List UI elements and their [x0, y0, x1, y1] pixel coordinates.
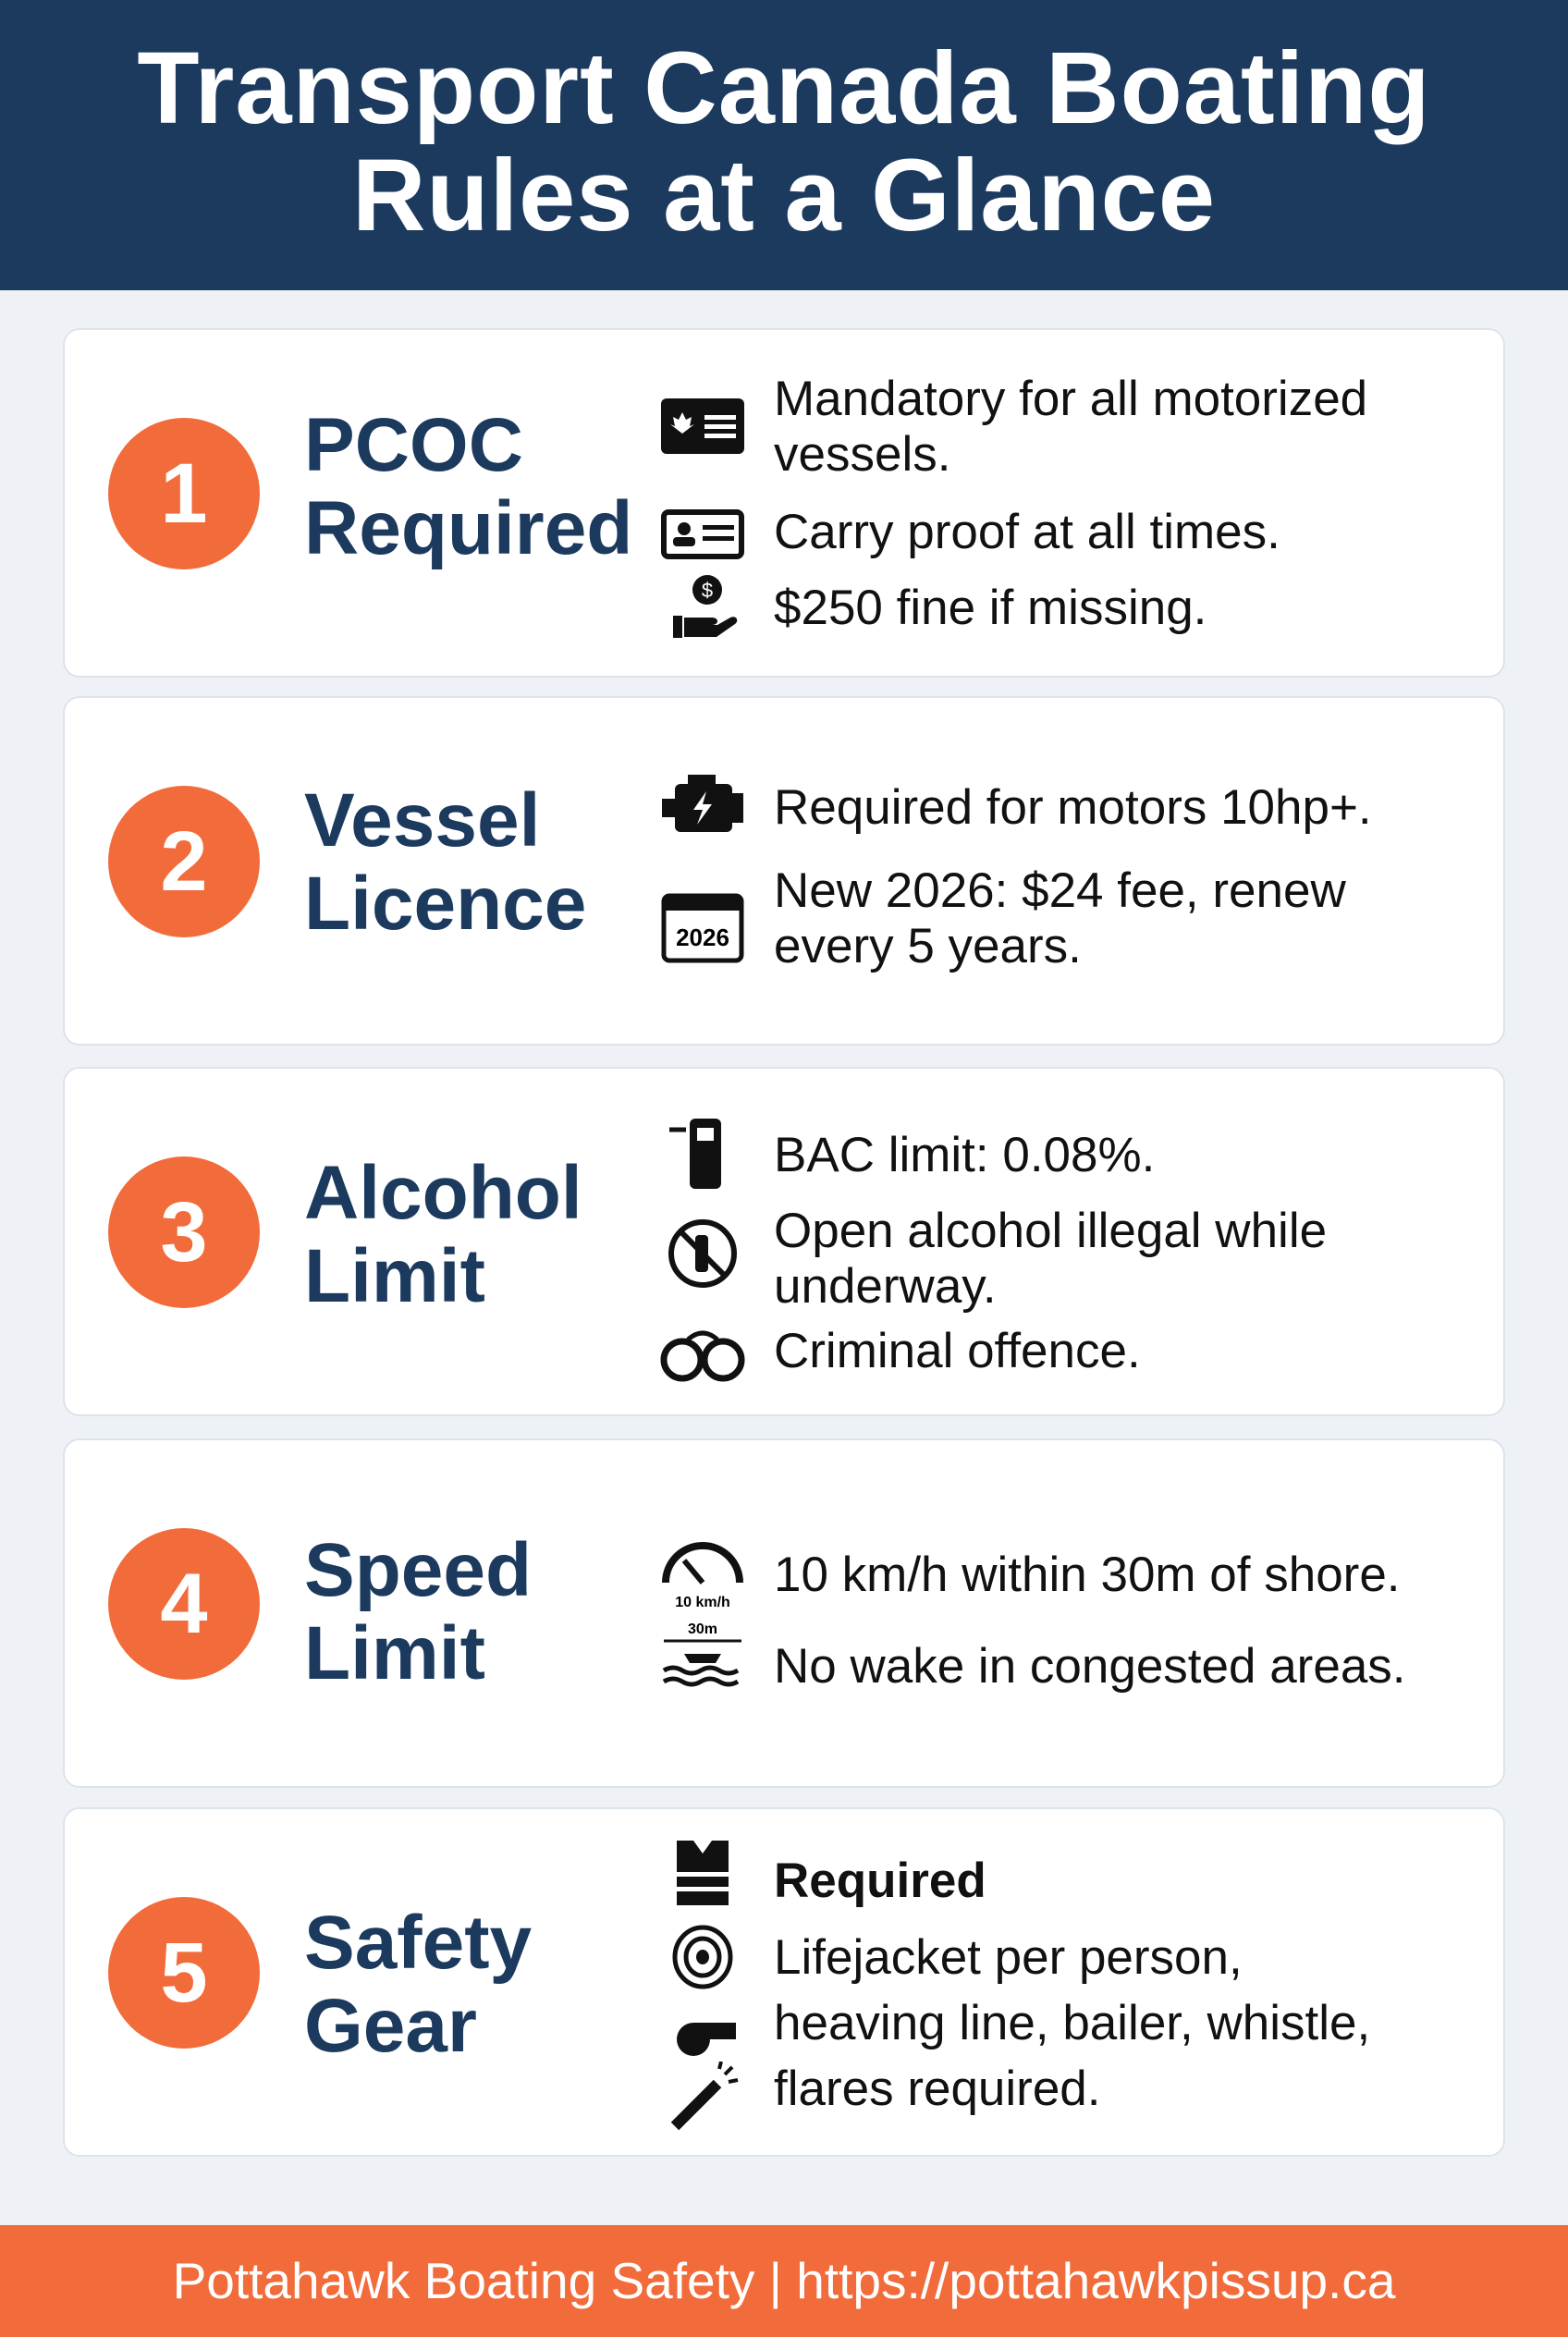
- panel: Safety Gear: [63, 1807, 1505, 2157]
- text: 10 km/h: 10 km/h within 30m of shore.: [774, 1548, 1401, 1602]
- panel: Alcohol Limit: [63, 1067, 1505, 1416]
- heading: PCOC Required: PCOC: [304, 403, 523, 487]
- heading: Speed Limit: Limit: [304, 1611, 485, 1695]
- icon: engine: [662, 775, 743, 832]
- heading: Alcohol Limit: Limit: [304, 1234, 485, 1318]
- icon: ID card: [661, 509, 744, 559]
- icon: hand with coin: [673, 575, 738, 638]
- text: gear list: heaving line, bailer, whistle,: [774, 1996, 1370, 2050]
- icon: no alcohol: [668, 1219, 737, 1288]
- text: open alcohol: [774, 1204, 1327, 1314]
- title: Rules at a Glance: [352, 139, 1216, 252]
- number badge 2: [108, 786, 260, 937]
- text: required: Required: [774, 1854, 986, 1908]
- text: gear list: flares required.: [774, 2062, 1101, 2116]
- icon: hand with coin: $: [702, 579, 713, 602]
- icon: flare: [671, 2062, 738, 2130]
- panel: PCOC required: [63, 328, 1505, 678]
- panel: Speed Limit: [63, 1438, 1505, 1788]
- footer: Pottahawk Boating Safety | https://pottahawkpissup.ca: [173, 2252, 1395, 2309]
- text: new 2026: every 5 years.: [774, 919, 1082, 973]
- heading: PCOC Required: [304, 403, 632, 570]
- icon: lifejacket: [677, 1841, 729, 1905]
- text: required motors: Required for motors 10hp+.: [774, 780, 1372, 835]
- number badge 2: 2: [160, 814, 208, 909]
- text: new 2026: New 2026: $24 fee, renew: [774, 863, 1346, 918]
- text: carry proof: Carry proof at all times.: [774, 505, 1280, 559]
- text: gear list: Lifejacket per person,: [774, 1930, 1243, 1985]
- icon: rope: [673, 1925, 732, 1989]
- number badge 1: 1: [160, 447, 208, 541]
- panel: Vessel Licence: [63, 696, 1505, 1046]
- heading: Safety Gear: Safety: [304, 1901, 532, 1985]
- number badge 5: 5: [160, 1926, 208, 2020]
- heading: Vessel Licence: Vessel: [304, 778, 540, 863]
- icon: handcuffs: [660, 1330, 745, 1381]
- icon: no wake: [662, 1621, 741, 1686]
- icon: calendar 2026: [662, 893, 743, 963]
- text: no wake: No wake in congested areas.: [774, 1639, 1406, 1694]
- heading: Vessel Licence: [304, 778, 586, 946]
- text: mandatory: vessels.: [774, 427, 950, 482]
- icon: calendar 2026: 2026: [676, 924, 729, 951]
- icon: whistle: [677, 2023, 736, 2056]
- title: Transport Canada Boating: [137, 31, 1431, 145]
- heading: Alcohol Limit: [304, 1151, 582, 1318]
- number badge 4: [108, 1528, 260, 1680]
- icon: breathalyzer: [669, 1119, 721, 1189]
- heading: Alcohol Limit: Alcohol: [304, 1151, 582, 1235]
- heading: Safety Gear: [304, 1901, 532, 2068]
- text: open alcohol: Open alcohol illegal while: [774, 1204, 1327, 1258]
- icon: speedometer: 10 km/h: [675, 1595, 730, 1610]
- text: mandatory: Mandatory for all motorized: [774, 372, 1367, 426]
- icon group: safety gear: [671, 1841, 738, 2130]
- text: fine: $250 fine if missing.: [774, 581, 1207, 635]
- footer: [0, 2225, 1568, 2337]
- heading: Vessel Licence: Licence: [304, 862, 586, 946]
- heading: Speed Limit: [304, 1528, 532, 1695]
- heading: Safety Gear: Gear: [304, 1984, 477, 2068]
- number badge 3: 3: [160, 1185, 208, 1279]
- title: [0, 0, 1568, 290]
- text: criminal: Criminal offence.: [774, 1324, 1141, 1378]
- heading: Speed Limit: Speed: [304, 1528, 532, 1612]
- number badge 5: [108, 1897, 260, 2049]
- text: gear list: [774, 1930, 1370, 2116]
- icon: speedometer: [662, 1542, 743, 1610]
- text: new 2026: [774, 863, 1346, 973]
- text: open alcohol: underway.: [774, 1259, 997, 1314]
- number badge 3: [108, 1156, 260, 1308]
- number badge 1: [108, 418, 260, 569]
- text: BAC: BAC limit: 0.08%.: [774, 1128, 1155, 1182]
- heading: PCOC Required: Required: [304, 486, 632, 570]
- number badge 4: 4: [160, 1557, 208, 1651]
- icon: card with maple leaf: [661, 398, 744, 454]
- icon: no wake: 30m: [688, 1621, 717, 1637]
- text: mandatory: [774, 372, 1367, 482]
